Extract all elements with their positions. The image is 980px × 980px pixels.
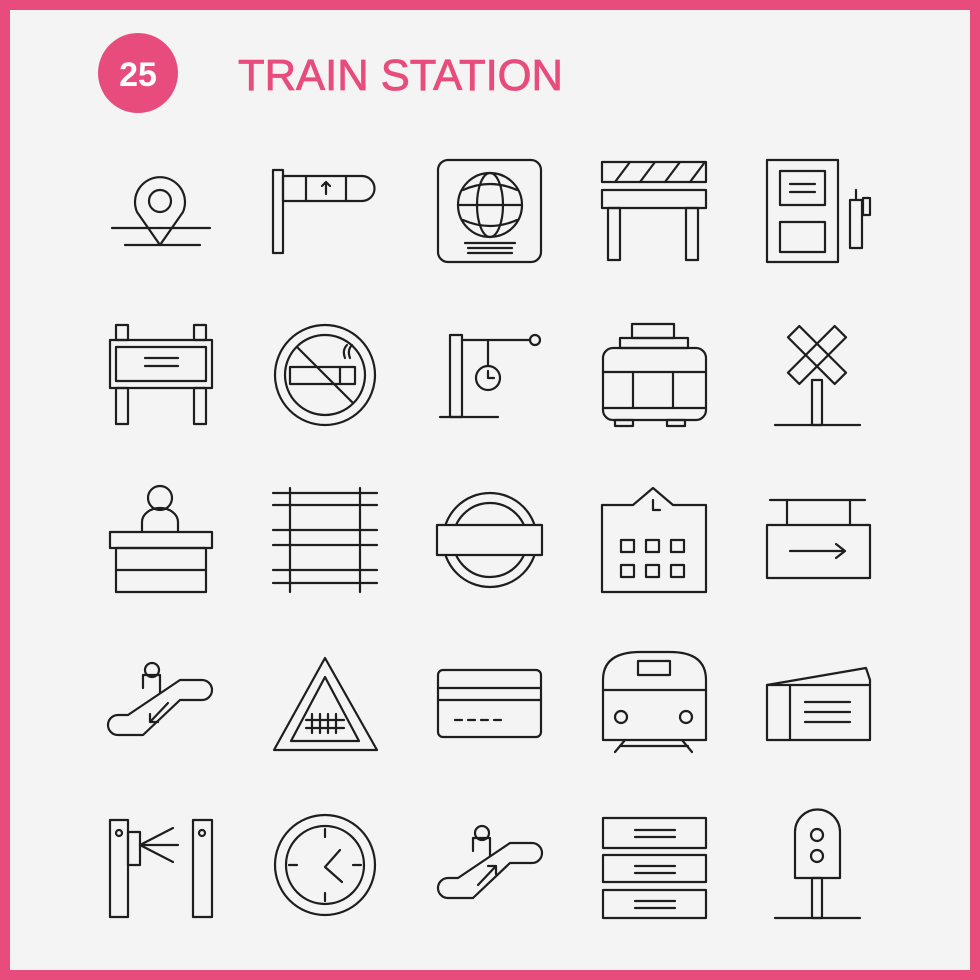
icon: clock	[275, 815, 375, 915]
icon: ticket machine	[767, 160, 870, 262]
icon: globe passport	[438, 160, 541, 262]
icon grid	[108, 160, 870, 918]
icon: escalator up	[438, 826, 542, 898]
icon: traffic signal	[775, 810, 860, 918]
badge: 25	[98, 33, 178, 113]
icon: location pin	[112, 177, 210, 245]
icon: stacked boards	[603, 818, 706, 918]
icon: barrier	[602, 162, 706, 260]
icon: station board	[110, 325, 212, 424]
icon: sign post	[273, 170, 374, 253]
icon: tram	[603, 324, 706, 426]
icon: underground logo	[437, 493, 542, 587]
icon: rail tracks	[273, 488, 377, 592]
icon: railway warning triangle	[274, 658, 377, 750]
icon: direction sign	[767, 500, 870, 578]
icon: no smoking	[275, 325, 375, 425]
icon: escalator down	[108, 663, 212, 735]
title: TRAIN STATION	[238, 51, 563, 100]
icon: credit card	[438, 670, 541, 737]
icon: hanging clock	[440, 335, 540, 417]
icon: train front	[603, 652, 706, 752]
icon: information desk	[110, 486, 212, 592]
icon: railroad crossing	[775, 326, 860, 425]
icon: tickets	[767, 668, 870, 740]
badge: 25: 25	[119, 56, 157, 94]
icon: ticket gate	[110, 820, 212, 917]
icon: station building	[602, 488, 706, 592]
